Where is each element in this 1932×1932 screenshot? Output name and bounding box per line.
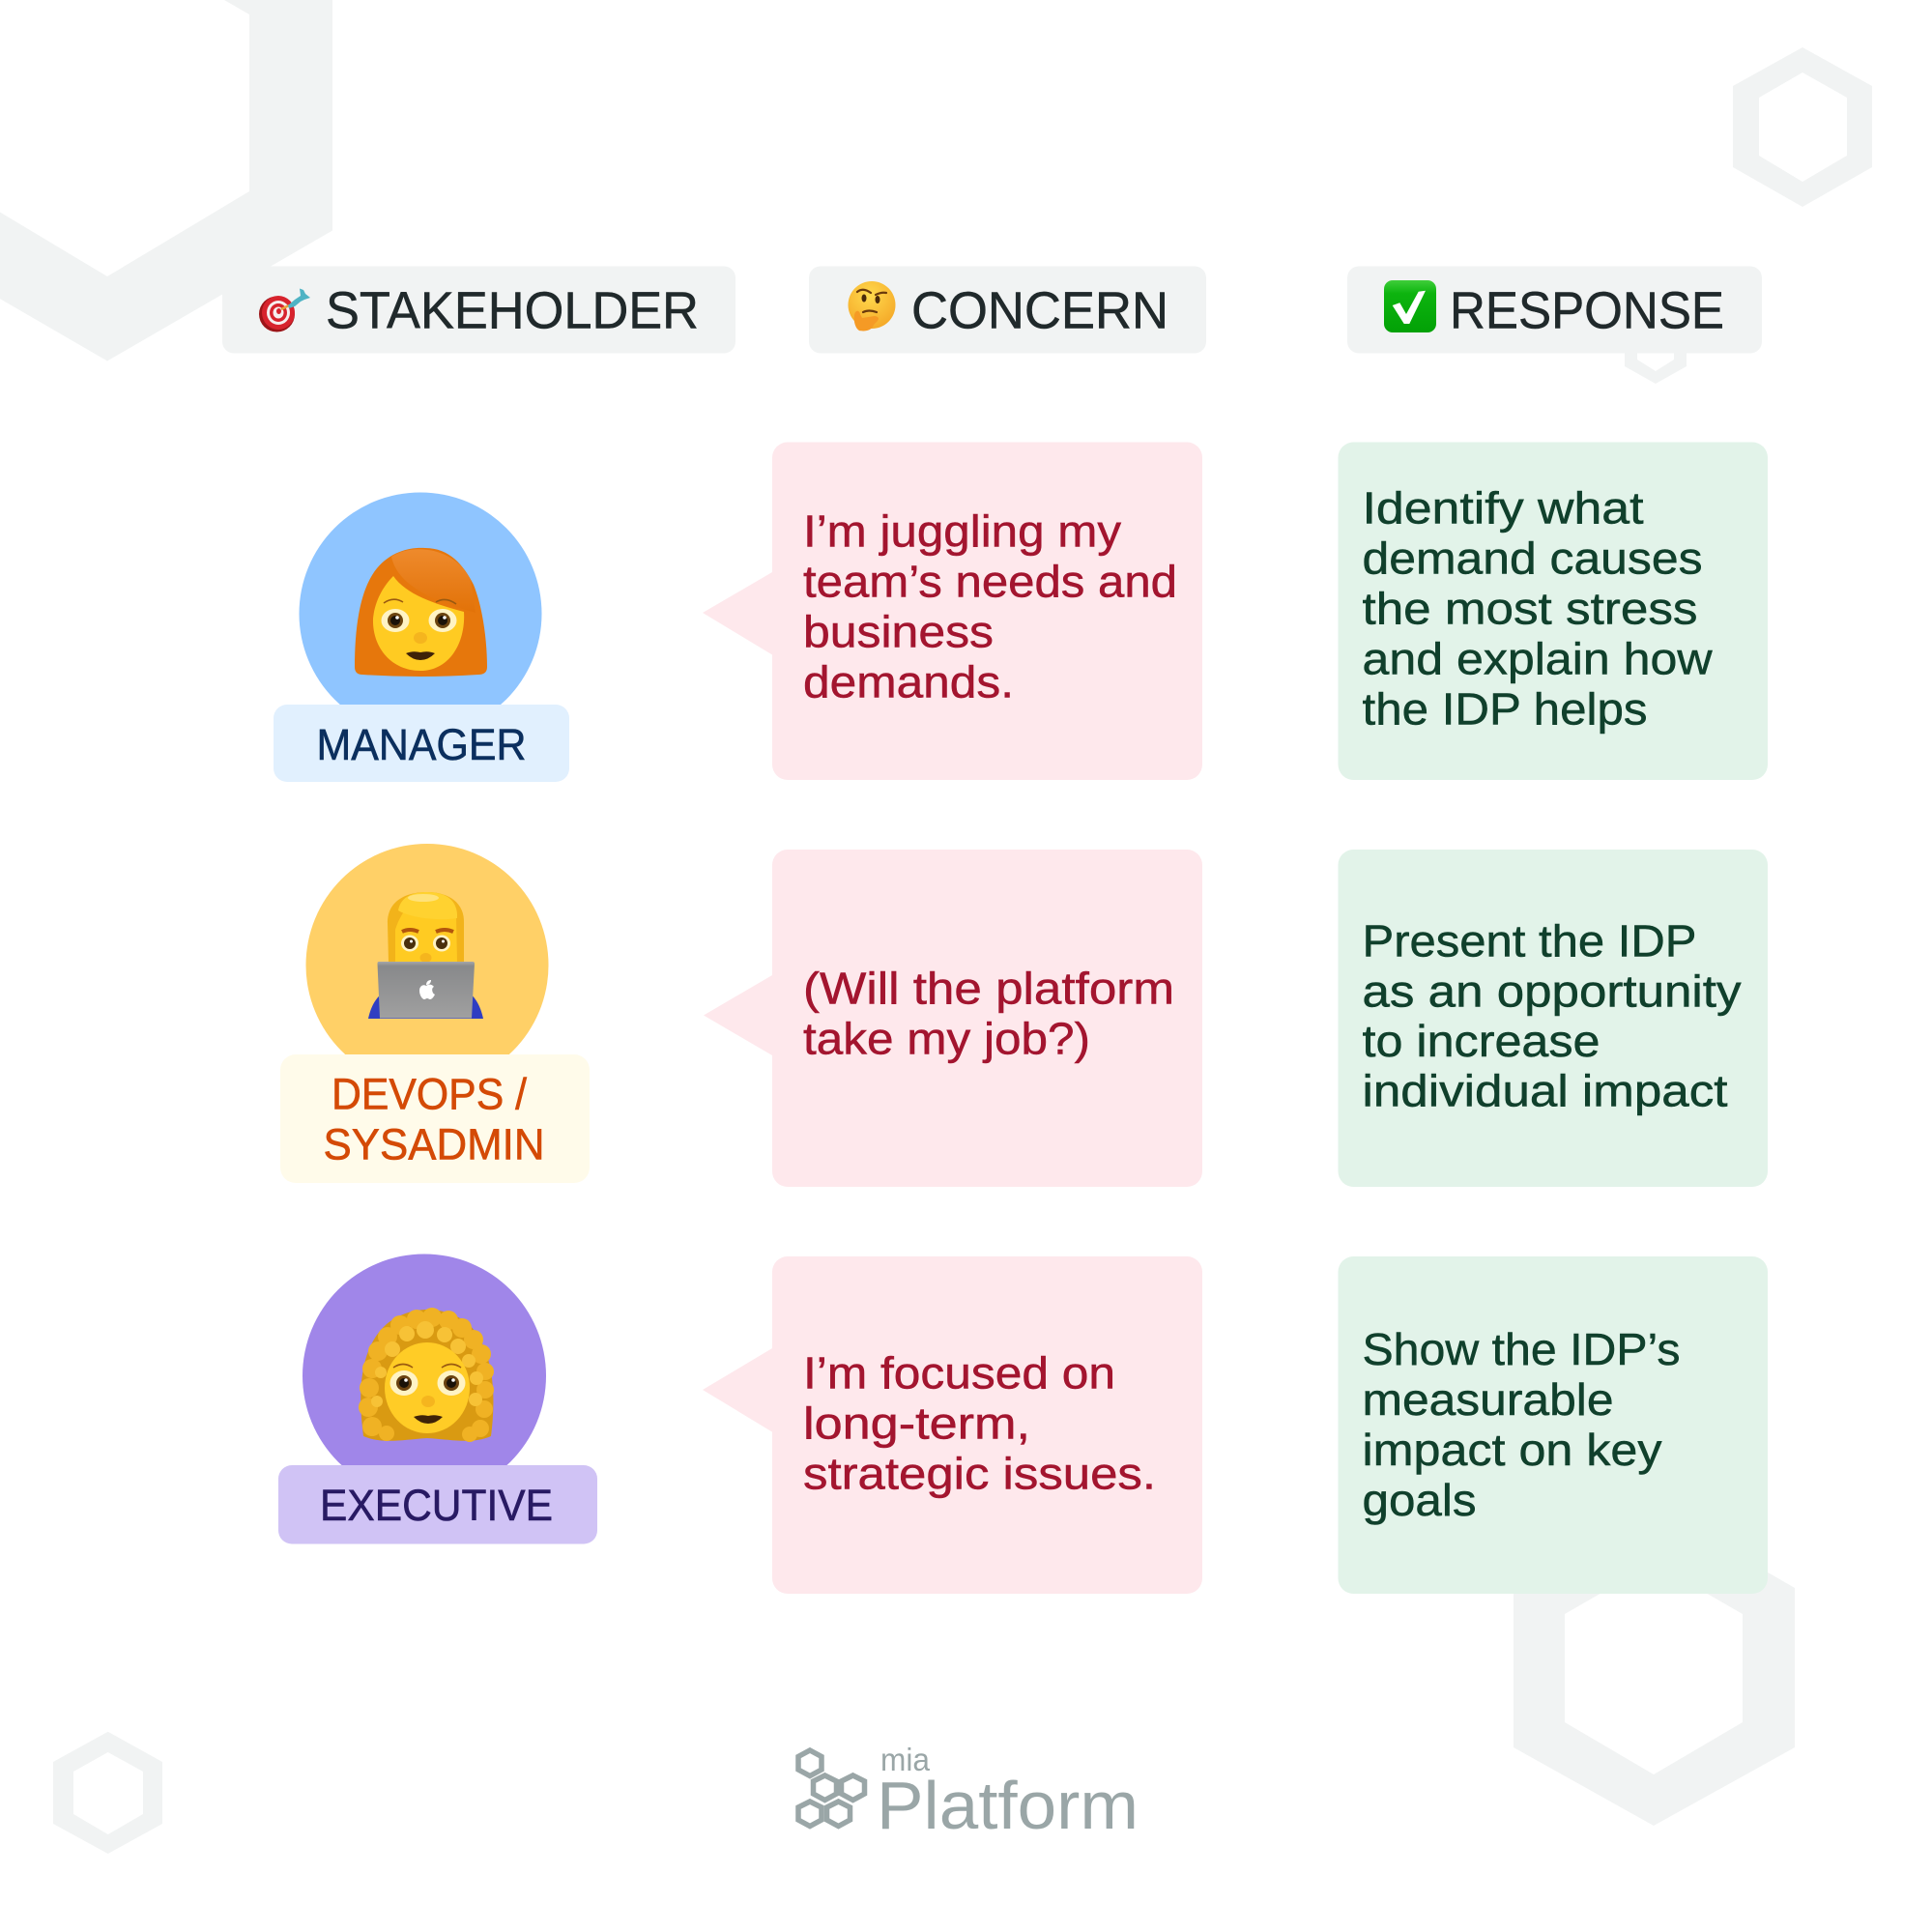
logo wordmark: mia: [880, 1742, 931, 1777]
concern pointer and card, row 1: [703, 443, 1202, 780]
label tag: [274, 705, 569, 782]
concern pointer and card, row 1: business: [803, 607, 994, 657]
concern pointer and card, row 3: strategic issues.: [803, 1448, 1156, 1498]
concern pointer and card, row 2: take my job?): [803, 1013, 1090, 1063]
icon: dart target: [259, 288, 310, 332]
concern pointer and card, row 1: I’m juggling my: [803, 506, 1121, 557]
concern pointer and card, row 2: (Will the platform: [803, 963, 1174, 1013]
response card, row 3: goals: [1363, 1475, 1477, 1525]
label tag: EXECUTIVE: [320, 1481, 553, 1530]
label tag: [278, 1465, 597, 1544]
header label: CONCERN: [911, 282, 1168, 340]
header: stakeholder: [222, 267, 735, 354]
icon: thinking face: [849, 281, 895, 331]
label tag: DEVOPS /: [332, 1069, 527, 1119]
logo hexagon mark: [798, 1750, 864, 1827]
response card, row 3: impact on key: [1363, 1425, 1662, 1475]
response card, row 1: demand causes: [1363, 533, 1703, 584]
concern pointer and card, row 3: long-term,: [803, 1398, 1030, 1448]
concern pointer and card, row 3: I’m focused on: [803, 1347, 1115, 1398]
avatar circle: [300, 493, 541, 735]
response card, row 1: and explain how: [1363, 634, 1713, 684]
response card, row 1: the most stress: [1363, 584, 1697, 634]
response card, row 2: Present the IDP: [1363, 916, 1697, 966]
background hexagon bottom right: [1514, 1507, 1795, 1826]
header: response: [1347, 267, 1762, 354]
response card, row 1: Identify what: [1363, 483, 1644, 533]
label tag: MANAGER: [317, 720, 526, 769]
logo: mia Platform: [798, 1742, 1139, 1843]
background hexagon top left: [0, 0, 332, 361]
response card, row 2: to increase: [1363, 1016, 1600, 1066]
stakeholder: executive: [278, 1254, 597, 1544]
icon: green check mark: [1384, 280, 1436, 332]
background hexagon top right: [1733, 47, 1872, 207]
label tag: [280, 1054, 590, 1183]
icon: woman with curly hair: [359, 1308, 494, 1442]
response card, row 1: the IDP helps: [1363, 684, 1647, 735]
response card, row 2: as an opportunity: [1363, 966, 1742, 1017]
concern pointer and card, row 3: [703, 1256, 1202, 1594]
background hexagon behind response header: [1625, 319, 1687, 384]
concern pointer and card, row 1: team’s needs and: [803, 557, 1177, 607]
icon: man with laptop: [368, 892, 483, 1019]
stakeholder: manager: [274, 493, 569, 782]
response card, row 2: individual impact: [1363, 1065, 1728, 1115]
response card, row 1: [1338, 443, 1768, 780]
label tag: SYSADMIN: [323, 1119, 545, 1169]
response card, row 3: measurable: [1363, 1374, 1614, 1425]
icon: woman with red hair: [355, 548, 487, 677]
response card, row 3: [1338, 1256, 1768, 1594]
stakeholder: devops / sysadmin: [280, 844, 590, 1183]
header: concern: [809, 267, 1206, 354]
concern pointer and card, row 1: demands.: [803, 657, 1014, 707]
response card, row 2: [1338, 850, 1768, 1187]
background hexagon bottom left: [53, 1732, 162, 1854]
logo: mia Platform: Platform: [877, 1768, 1139, 1843]
header label: RESPONSE: [1450, 282, 1724, 340]
response card, row 3: Show the IDP’s: [1363, 1324, 1680, 1374]
header label: STAKEHOLDER: [326, 282, 699, 340]
avatar circle: [303, 1254, 546, 1498]
avatar circle: [305, 844, 549, 1086]
concern pointer and card, row 2: [704, 850, 1202, 1187]
